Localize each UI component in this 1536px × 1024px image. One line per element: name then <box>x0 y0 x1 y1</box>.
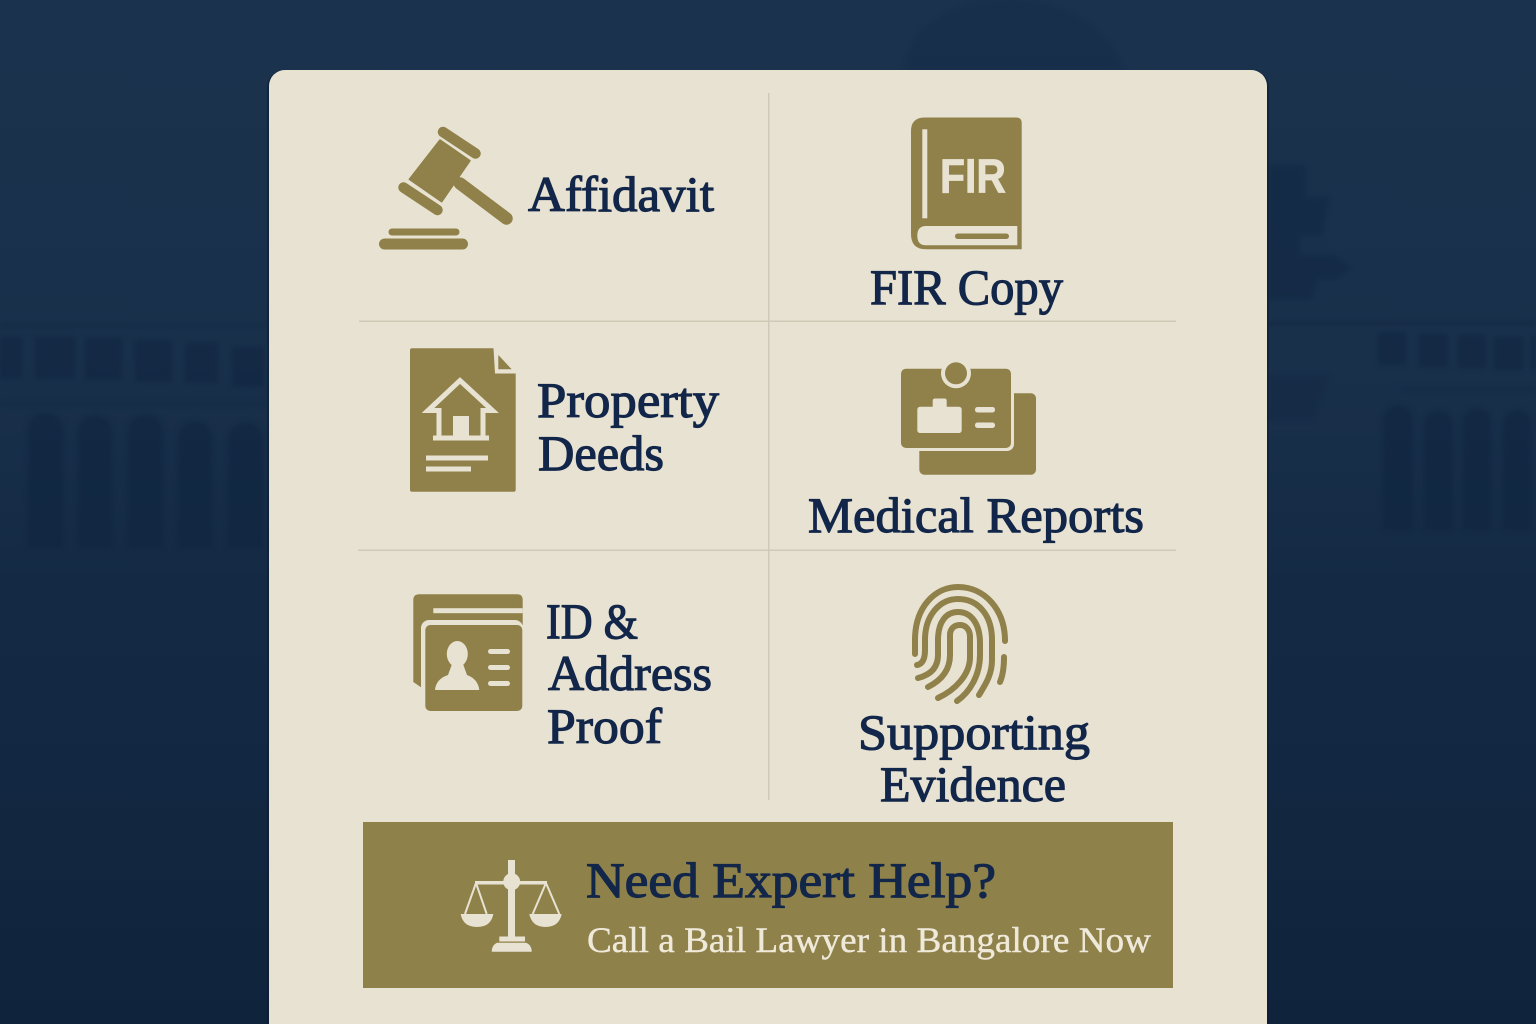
icon: scales of justice <box>461 860 562 952</box>
label: Property Deeds <box>537 372 719 481</box>
label: ID & Address Proof: Address <box>548 645 712 701</box>
icon: FIR book: FIR <box>940 151 1006 204</box>
item: Property Deeds <box>410 348 719 492</box>
panel: document checklist card <box>267 70 1269 1024</box>
label: Supporting Evidence: Evidence <box>880 756 1066 812</box>
icon: ID cards <box>413 594 523 712</box>
item: Supporting Evidence <box>858 587 1090 812</box>
subheading: call line: Call a Bail Lawyer in Bangalore Now <box>587 920 1151 960</box>
label: Property Deeds: Deeds <box>538 425 664 481</box>
label: ID & Address Proof: Proof <box>547 698 662 754</box>
heading: Need Expert Help?: Need Expert Help? <box>586 852 996 908</box>
label: Medical Reports: Medical Reports <box>808 487 1144 543</box>
label: ID & Address Proof <box>546 593 712 754</box>
icon: gavel <box>379 132 506 250</box>
icon: medical ID badge <box>898 358 1036 475</box>
label: Supporting Evidence: Supporting <box>858 704 1090 760</box>
label: Supporting Evidence <box>858 704 1090 812</box>
label: ID & Address Proof: ID & <box>546 593 638 649</box>
background: faded court building silhouette <box>0 0 1536 548</box>
banner: call to action <box>363 822 1173 988</box>
label: Property Deeds: Property <box>537 372 719 428</box>
item: FIR Copy <box>870 118 1063 315</box>
icon: FIR book <box>911 118 1022 249</box>
item: Affidavit <box>379 132 714 250</box>
item: Medical Reports <box>808 358 1144 543</box>
icon: property deed document <box>410 348 516 492</box>
label: Affidavit: Affidavit <box>528 166 714 222</box>
item: ID & Address Proof <box>413 593 712 754</box>
icon: fingerprint <box>915 587 1005 701</box>
label: FIR Copy: FIR Copy <box>870 259 1063 315</box>
